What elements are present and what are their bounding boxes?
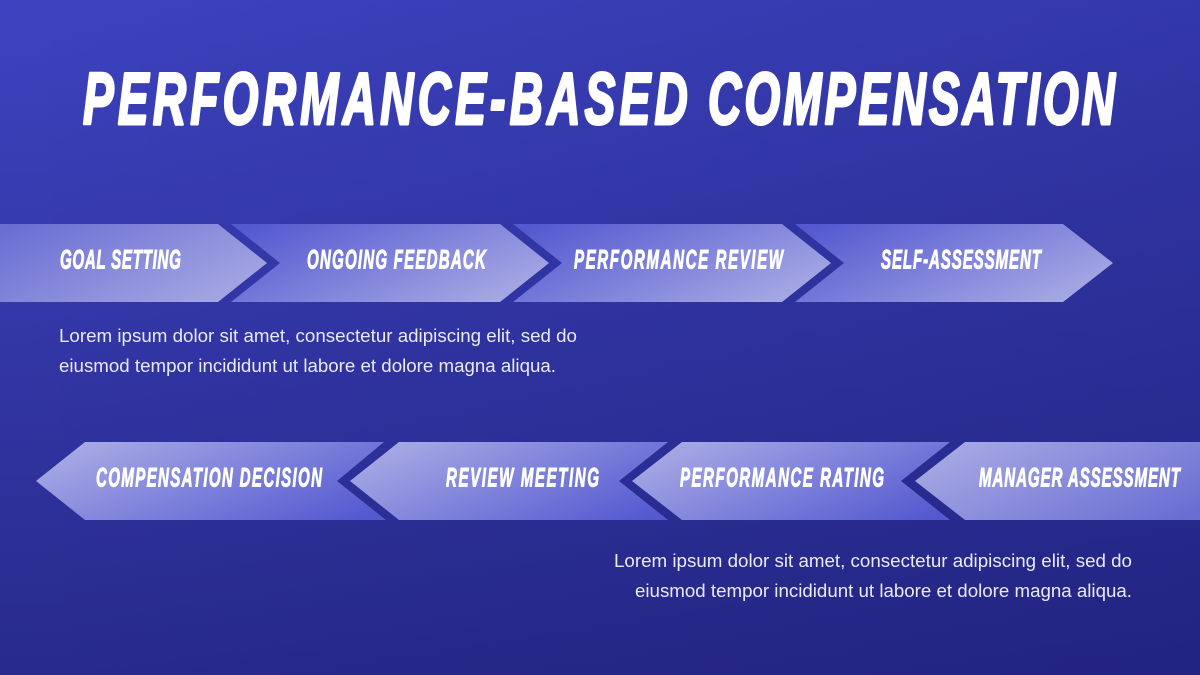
bottom description text: Lorem ipsum dolor sit amet, consectetur adipiscing elit, sed do xyxy=(614,551,1132,571)
top description text: eiusmod tempor incididunt ut labore et dolore magna aliqua. xyxy=(59,356,556,376)
bottom process row xyxy=(36,442,1200,520)
step: goal setting xyxy=(0,224,267,302)
title xyxy=(83,58,1116,140)
step: compensation decision xyxy=(36,442,386,520)
step: manager assessment xyxy=(915,442,1200,520)
step: review meeting: REVIEW MEETING xyxy=(446,462,599,493)
top description text: Lorem ipsum dolor sit amet, consectetur adipiscing elit, sed do xyxy=(59,326,577,346)
top process row xyxy=(0,224,1113,302)
step: compensation decision: COMPENSATION DECISION xyxy=(96,462,323,493)
top description text xyxy=(59,326,577,376)
step: goal setting: GOAL SETTING xyxy=(60,244,181,275)
step: self-assessment: SELF-ASSESSMENT xyxy=(881,244,1042,275)
title: COMPENSATION xyxy=(708,58,1116,140)
step: ongoing feedback: ONGOING FEEDBACK xyxy=(307,244,487,275)
step: performance review xyxy=(513,224,831,302)
bottom description text: eiusmod tempor incididunt ut labore et dolore magna aliqua. xyxy=(635,581,1132,601)
step: self-assessment xyxy=(795,224,1113,302)
step: ongoing feedback xyxy=(231,224,549,302)
step: performance rating xyxy=(632,442,950,520)
step: review meeting xyxy=(350,442,668,520)
step: performance review: PERFORMANCE REVIEW xyxy=(574,244,785,275)
step: manager assessment: MANAGER ASSESSMENT xyxy=(979,462,1181,493)
step: performance rating: PERFORMANCE RATING xyxy=(680,462,884,493)
title: PERFORMANCE-BASED xyxy=(83,58,688,140)
bottom description text xyxy=(614,551,1132,601)
